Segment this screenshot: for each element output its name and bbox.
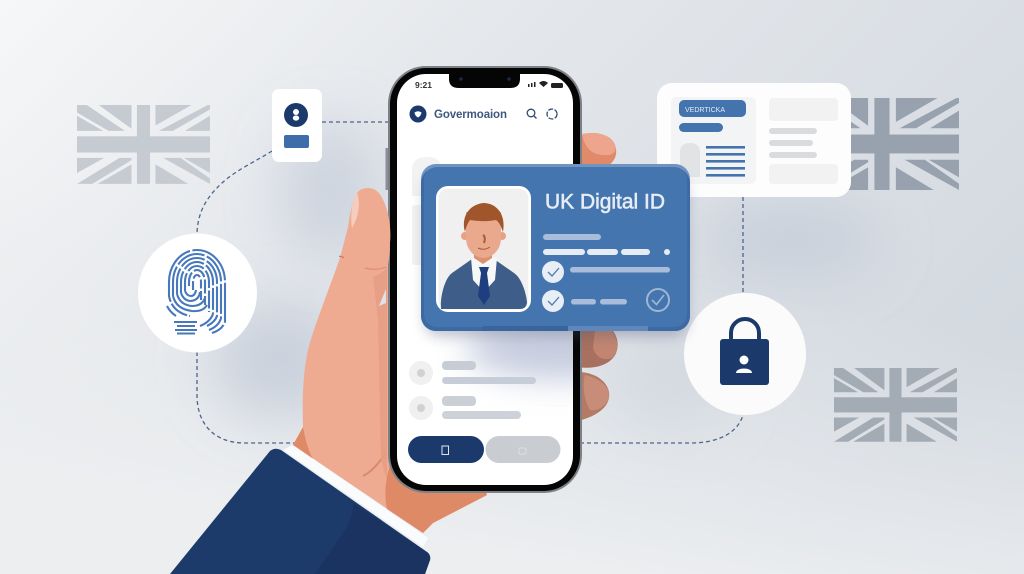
flag: top right bbox=[805, 98, 959, 190]
dashed connectors bbox=[197, 122, 743, 443]
flag: bottom right bbox=[834, 368, 957, 442]
shirt cuff bbox=[283, 445, 428, 547]
jacket bbox=[441, 259, 527, 309]
list rows bbox=[409, 361, 536, 420]
notch bbox=[449, 74, 520, 88]
portrait bbox=[441, 203, 527, 309]
right panel bbox=[769, 98, 838, 184]
thumb bbox=[339, 188, 390, 480]
tie bbox=[478, 267, 490, 305]
left panel: VEDRTICKA bbox=[685, 107, 725, 114]
thumbnail bbox=[351, 193, 359, 228]
sleeve bbox=[170, 445, 430, 574]
shirt bbox=[471, 258, 497, 292]
palm shading: wrist left bbox=[293, 427, 313, 459]
buttons bbox=[408, 436, 560, 463]
icon: fingerprint bbox=[167, 250, 225, 334]
thumb joint crease bbox=[365, 267, 386, 269]
app header bbox=[410, 106, 557, 122]
document card bbox=[657, 83, 851, 197]
app header: Govermoaion bbox=[434, 109, 507, 121]
ghost content behind card bbox=[412, 157, 452, 265]
thumb shade: right edge bbox=[373, 268, 387, 480]
status time: 9:21 bbox=[415, 80, 432, 90]
left panel bbox=[671, 97, 756, 184]
flag: top left bbox=[77, 105, 210, 184]
phone bbox=[386, 66, 582, 493]
check icons bbox=[542, 261, 669, 312]
jacket sleeve bbox=[170, 449, 430, 574]
icon: padlock bbox=[720, 319, 769, 385]
card title: UK Digital ID bbox=[545, 190, 665, 214]
avatar icon bbox=[284, 103, 308, 127]
knuckle mark bbox=[339, 256, 344, 258]
thumb gap bbox=[379, 289, 386, 306]
card bottom edge bbox=[483, 326, 648, 331]
hair bbox=[464, 203, 504, 232]
icon: refresh bbox=[547, 109, 557, 119]
ID card shadow bbox=[425, 178, 687, 336]
neck bbox=[474, 250, 492, 264]
photo frame bbox=[436, 186, 531, 312]
face bbox=[466, 212, 501, 258]
hand bbox=[293, 133, 618, 533]
nose and mouth bbox=[483, 235, 485, 243]
lock badge bbox=[684, 293, 806, 415]
small profile card bbox=[272, 89, 322, 162]
sleeve shade bbox=[315, 503, 430, 574]
screen shadow bbox=[456, 331, 573, 396]
palm shading: under phone bbox=[385, 462, 487, 533]
ears bbox=[461, 232, 469, 240]
card bar bbox=[284, 135, 309, 148]
ID card bbox=[421, 164, 690, 331]
icon: search bbox=[527, 109, 536, 118]
card data lines bbox=[543, 234, 670, 304]
palm crease bbox=[363, 452, 386, 476]
fingerprint badge bbox=[138, 234, 257, 352]
palm bbox=[293, 258, 487, 533]
fingers behind phone bbox=[570, 133, 618, 423]
status icons bbox=[528, 81, 563, 88]
